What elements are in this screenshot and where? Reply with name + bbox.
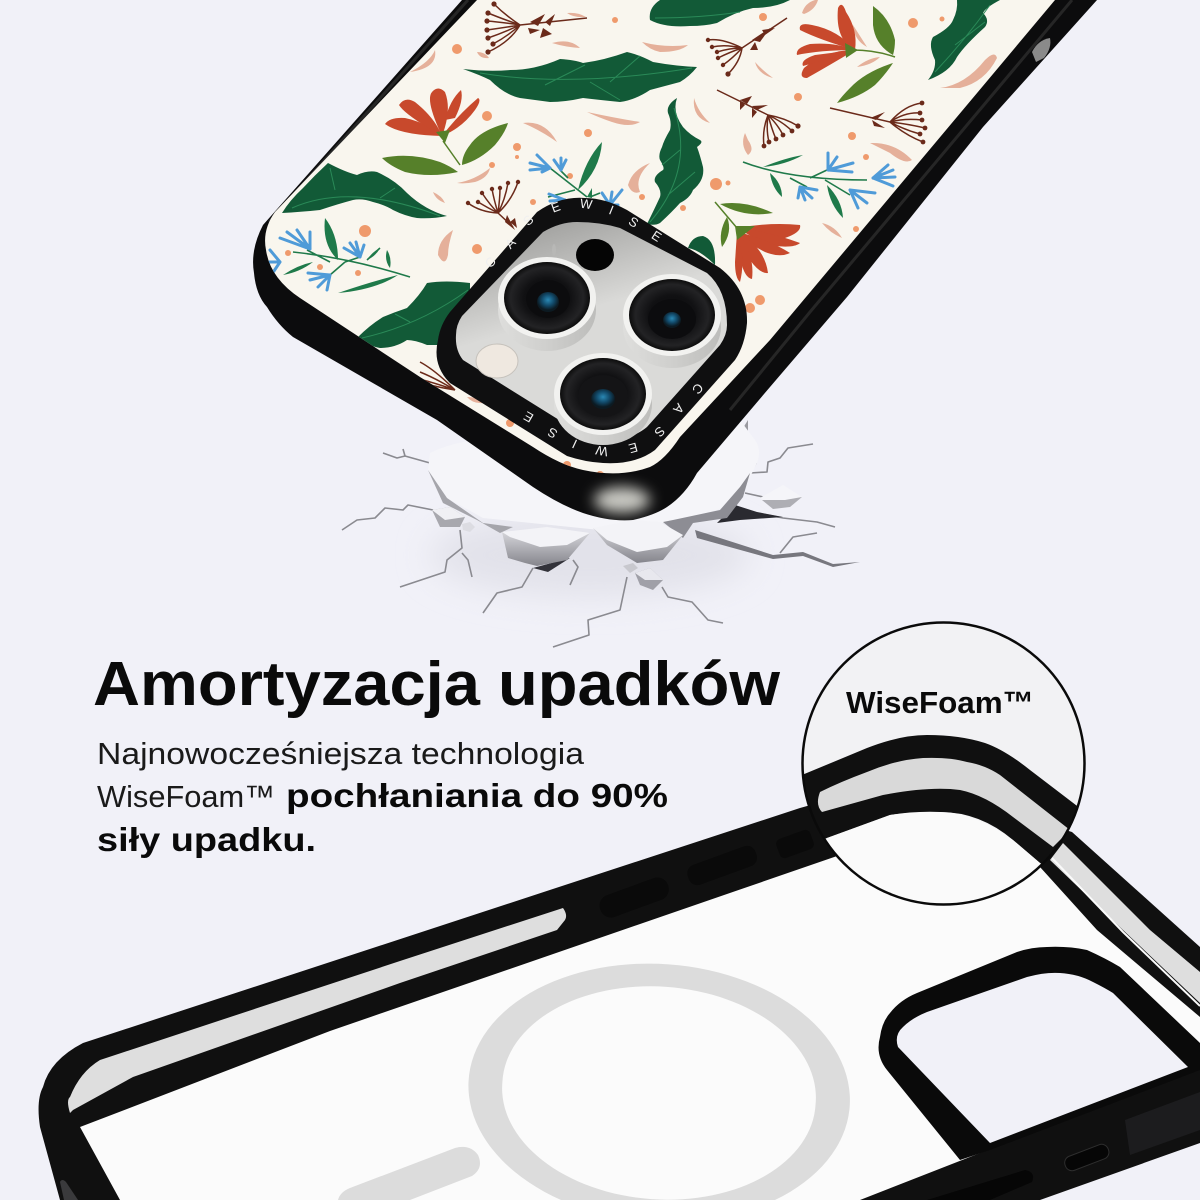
description text: WiseFoam™	[97, 779, 275, 814]
callout background	[826, 812, 1042, 864]
dark fissures	[533, 420, 860, 572]
CASEWISE lettering: W	[579, 196, 594, 212]
description text	[97, 736, 668, 858]
cracked ground impact	[342, 420, 860, 647]
red flowers	[385, 5, 856, 282]
CASEWISE lettering: W	[594, 442, 609, 459]
MagSafe ring	[468, 964, 850, 1200]
MagSafe pill	[338, 1147, 480, 1200]
floral back panel	[265, 0, 1055, 473]
CASEWISE lettering: S	[626, 213, 642, 231]
left hole	[60, 1180, 78, 1200]
upper right leaf	[928, 0, 1000, 80]
plate edge right	[663, 473, 750, 538]
floral pattern	[269, 0, 1000, 479]
green leaves	[282, 0, 1000, 348]
CASEWISE lettering: E	[627, 440, 639, 456]
rail sheen	[1125, 1092, 1200, 1155]
clear back panel	[80, 855, 1200, 1200]
side button gloss	[1032, 38, 1050, 62]
CASEWISE lettering: S	[651, 423, 668, 440]
rim sheen	[269, 0, 1072, 410]
CASEWISE lettering: E	[649, 227, 665, 245]
camera cutout window	[897, 973, 1188, 1143]
brown dandelions	[420, 4, 925, 390]
CASEWISE lettering: A	[502, 235, 519, 252]
CASEWISE lettering: S	[520, 212, 537, 229]
heading: Amortyzacja upadków	[93, 650, 781, 719]
sprig leaves and stems	[293, 162, 867, 277]
magnified strip	[818, 758, 1070, 847]
flash	[476, 344, 518, 378]
peach swirls	[410, 0, 997, 403]
impact soft shadow	[430, 513, 750, 597]
CASEWISE lettering	[482, 196, 707, 459]
CASEWISE lettering: C	[482, 254, 499, 271]
right fragment	[593, 520, 683, 563]
camera cutout frame	[879, 947, 1200, 1160]
crack lines	[342, 444, 835, 647]
description text: siły upadku.	[97, 821, 316, 858]
magnified rails	[804, 735, 1077, 864]
CASEWISE lettering: A	[670, 401, 687, 417]
camera island	[436, 196, 747, 463]
clear case with black bumper	[39, 780, 1200, 1200]
central wavy leaf	[463, 52, 697, 102]
charging port	[1063, 1142, 1111, 1173]
description text: Najnowocześniejsza technologia	[97, 736, 585, 771]
CASEWISE lettering: C	[689, 380, 707, 397]
camera hole	[576, 239, 614, 271]
leaf behind island	[358, 282, 470, 348]
description text: pochłaniania do 90%	[286, 777, 668, 814]
magnified detail	[804, 735, 1077, 867]
CASEWISE lettering: I	[607, 202, 616, 218]
small leaf near island	[688, 236, 715, 265]
left leaf	[282, 163, 447, 218]
CASEWISE lettering: E	[521, 408, 536, 426]
lens two	[623, 274, 721, 368]
top leaf	[650, 0, 790, 26]
CASEWISE lettering: E	[549, 198, 563, 216]
thin white edge	[1052, 858, 1200, 1006]
callout label: WiseFoam™	[846, 685, 1034, 720]
lens three	[554, 353, 652, 445]
lens one	[498, 257, 596, 351]
callout ring	[802, 622, 1084, 904]
small rocks	[432, 485, 802, 590]
bumper highlight	[594, 487, 650, 513]
phone with floral case	[253, 0, 1097, 520]
CASEWISE lettering: S	[545, 424, 560, 442]
silver camera plate	[456, 222, 727, 438]
right strip	[1050, 843, 1200, 1003]
bottom button	[927, 1170, 1033, 1200]
magnified clear area	[826, 812, 1040, 864]
plate edge left	[428, 470, 513, 533]
left strip	[68, 908, 566, 1113]
leaf veins	[292, 5, 990, 338]
upper plate	[428, 420, 759, 530]
center ruffled leaf	[647, 98, 703, 225]
olive leaves and stems	[382, 6, 895, 247]
island black ring	[436, 198, 747, 463]
side buttons	[596, 828, 815, 921]
magnifier callout	[790, 622, 1085, 905]
black case silhouette	[39, 780, 1200, 1200]
case black bumper	[253, 0, 1097, 520]
orange dots	[285, 13, 944, 479]
CASEWISE lettering: I	[570, 436, 579, 452]
microphone	[552, 244, 556, 256]
blue flowers	[269, 153, 895, 290]
left fragment	[502, 527, 590, 566]
